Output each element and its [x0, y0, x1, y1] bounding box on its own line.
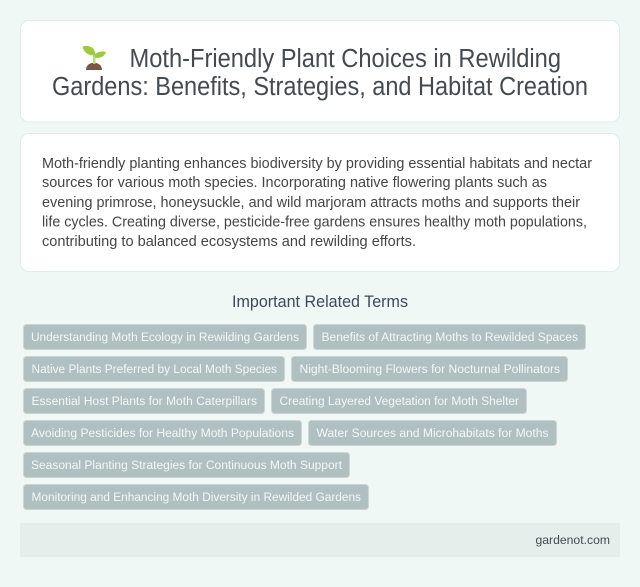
tag: benefits [314, 324, 586, 350]
tag: benefits: Benefits of Attracting Moths to Rewilded Spaces [322, 330, 578, 344]
icon: seedling [82, 46, 106, 70]
panel: title header [20, 20, 620, 122]
title: Moth-Friendly Plant Choices in Rewilding [130, 45, 561, 73]
tag: moth ecology [24, 324, 306, 350]
tag: avoiding pesticides: Avoiding Pesticides for Healthy Moth Populations [31, 426, 294, 440]
title: Gardens: Benefits, Strategies, and Habitat Creation [52, 73, 588, 101]
text block: summary: Moth-friendly planting enhances biodiversity by providing essential habitats and nectar [42, 156, 592, 172]
tag: water sources [308, 420, 556, 446]
tag: host plants: Essential Host Plants for Moth Caterpillars [32, 394, 257, 408]
text block: summary: sources for various moth species. Incorporating native flowering plants such as [42, 175, 547, 191]
tag: night-blooming flowers [292, 356, 568, 382]
tag: water sources: Water Sources and Microhabitats for Moths [316, 426, 548, 440]
tag: monitoring diversity [24, 484, 368, 510]
tag: native plants: Native Plants Preferred by Local Moth Species [32, 362, 277, 376]
panel: summary paragraph [20, 134, 620, 272]
tag: native plants [24, 356, 284, 382]
footer bar [20, 523, 620, 557]
text block: summary [42, 156, 592, 250]
heading: related terms: Important Related Terms [232, 293, 408, 311]
tag: host plants [24, 388, 264, 414]
text block: summary: evening primrose, honeysuckle, and wild marjoram attracts moths and supports their [42, 195, 580, 211]
tag: layered vegetation [272, 388, 526, 414]
tag: night-blooming flowers: Night-Blooming Flowers for Nocturnal Pollinators [300, 362, 560, 376]
tag: layered vegetation: Creating Layered Vegetation for Moth Shelter [280, 394, 519, 408]
footer: site name: gardenot.com [536, 533, 610, 547]
text block: summary: contributing to balanced ecosystems and rewilding efforts. [42, 234, 416, 250]
tag: seasonal planting: Seasonal Planting Strategies for Continuous Moth Support [31, 458, 343, 472]
tag: seasonal planting [24, 452, 350, 478]
tag: avoiding pesticides [24, 420, 302, 446]
tag: monitoring diversity: Monitoring and Enhancing Moth Diversity in Rewilded Gardens [32, 490, 361, 504]
text block: summary: life cycles. Creating diverse, pesticide-free gardens ensures healthy moth populations, [42, 214, 587, 230]
tag: moth ecology: Understanding Moth Ecology in Rewilding Gardens [31, 330, 299, 344]
title [52, 45, 588, 101]
